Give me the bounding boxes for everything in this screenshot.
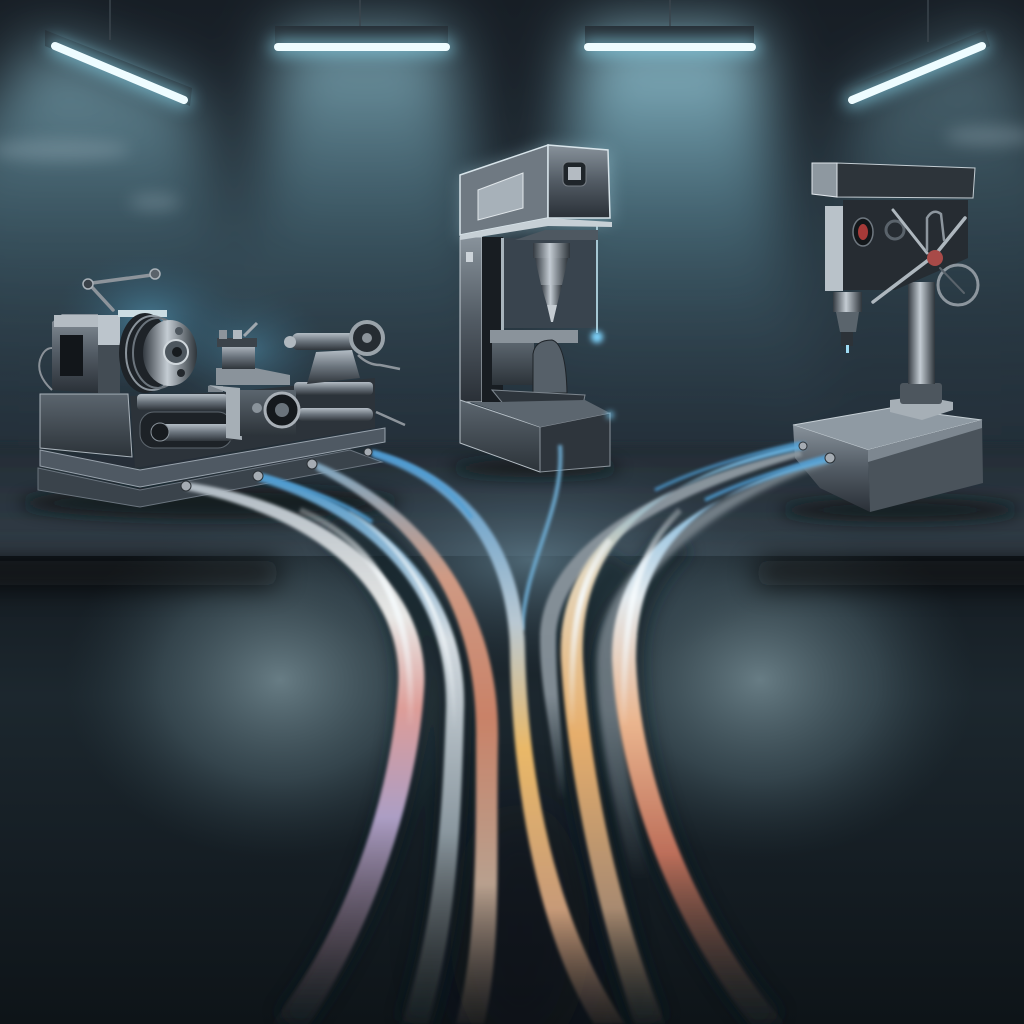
- drill base: [793, 408, 983, 512]
- lathe chuck: [119, 313, 197, 393]
- machine: drill press: [793, 163, 983, 512]
- press spindle: [533, 243, 570, 322]
- press column: [460, 225, 598, 402]
- light cones: [0, 30, 1024, 450]
- drill head: [812, 163, 975, 291]
- machine: lathe: [38, 269, 405, 507]
- machine shadows on floor: [20, 459, 1020, 522]
- ceiling lights: [45, 0, 990, 106]
- lathe base: [38, 378, 385, 507]
- cable connectors: [181, 442, 835, 491]
- lathe carriage: [208, 323, 299, 440]
- lathe tailstock: [284, 322, 405, 425]
- drill column: [890, 282, 953, 420]
- cable 7 grey: [540, 450, 802, 800]
- cable blue start stripes: [262, 443, 830, 522]
- press table: [490, 330, 585, 412]
- cable dark halos: [290, 525, 770, 1024]
- lathe headstock: [39, 310, 167, 393]
- machine: press centre: [460, 145, 614, 472]
- floor shelf: [0, 445, 1024, 560]
- cable 8: [612, 455, 832, 1024]
- cable 6: [561, 442, 805, 1024]
- lathe bed rails: [137, 382, 373, 448]
- cable 9 grey rear: [597, 458, 828, 880]
- cable 3: [316, 462, 498, 1024]
- drill spindle: [833, 292, 862, 353]
- press base: [460, 400, 610, 472]
- lathe lever: [90, 275, 152, 310]
- cable 1: [186, 482, 424, 1024]
- cable 4: [372, 450, 625, 1024]
- press top housing: [460, 145, 612, 240]
- press glow spots: [591, 331, 614, 419]
- cables: [181, 442, 835, 1024]
- cable highlights: [300, 510, 680, 730]
- machine back glow: [55, 250, 330, 410]
- press glow: [460, 145, 612, 240]
- drill handle: [873, 210, 978, 305]
- wall reflections: [0, 126, 1024, 210]
- cable 5 thin centre: [522, 445, 560, 630]
- lower wall: [0, 445, 1024, 1024]
- cable 2: [258, 473, 464, 1024]
